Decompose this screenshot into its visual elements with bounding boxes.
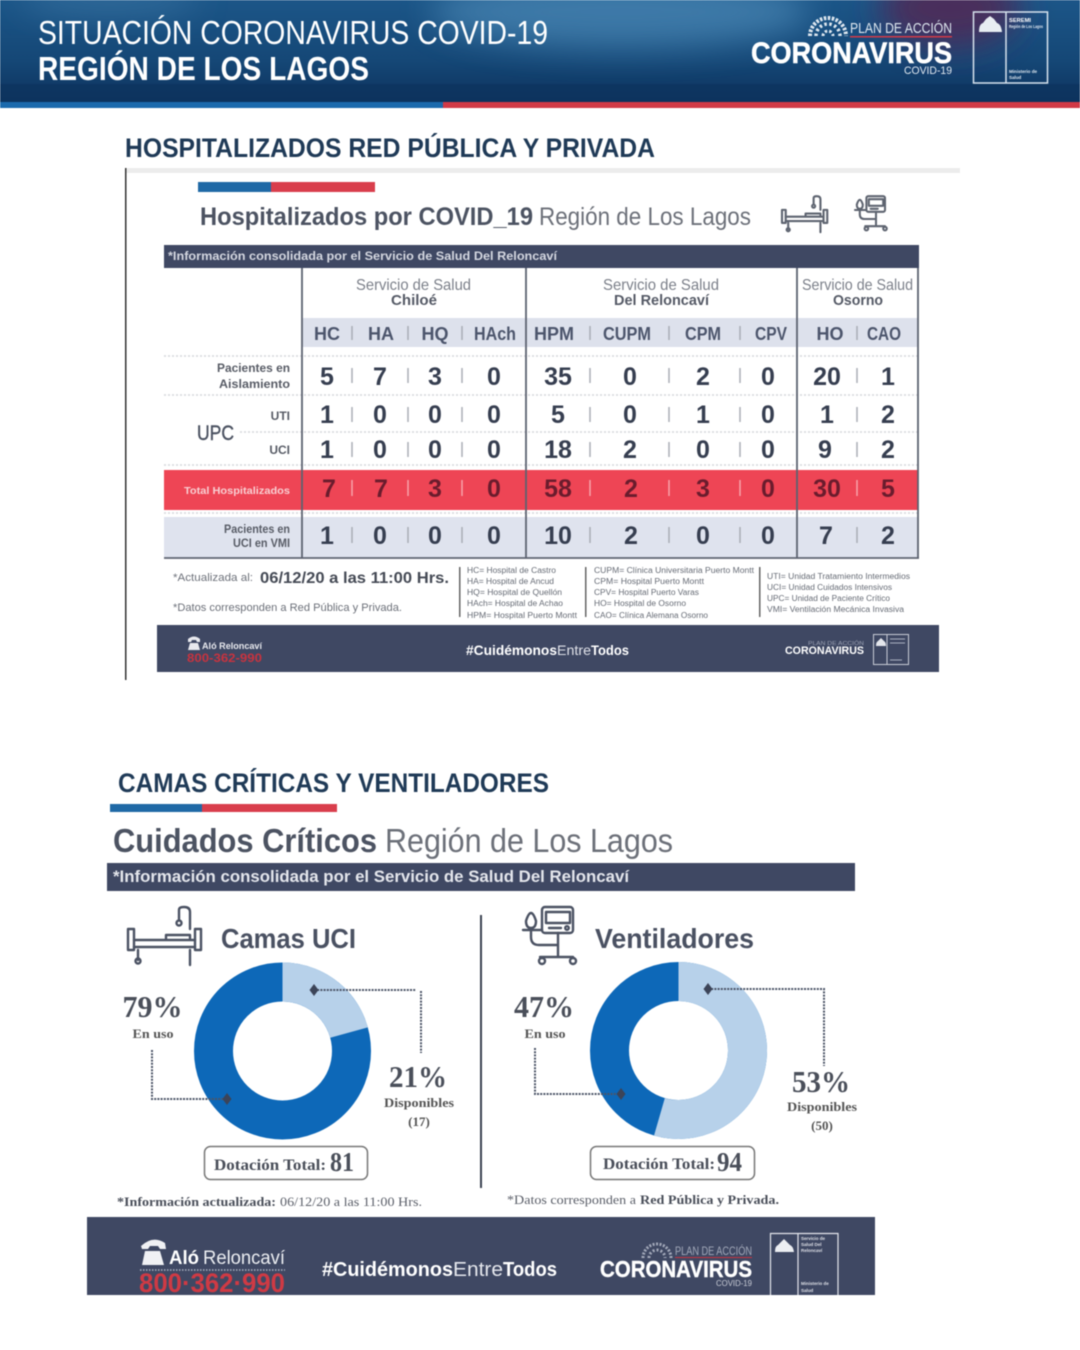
column headers: hospitals: CAO xyxy=(867,324,901,344)
row: pacientes en aislamiento: 5 xyxy=(320,363,334,391)
info bar: cuidados críticos: *Información consolidada por el Servicio de Salud Del Reloncaví xyxy=(113,867,630,886)
header title: REGIÓN DE LOS LAGOS xyxy=(38,50,369,87)
column headers: hospitals: CUPM xyxy=(603,324,651,344)
row: total hospitalizados: 7 xyxy=(374,475,388,503)
footer band: table: Aló Reloncaví xyxy=(202,641,263,651)
row: UTI: 0 xyxy=(487,401,501,429)
heading: ventiladores: Ventiladores xyxy=(595,923,754,954)
total box: 94 xyxy=(590,1146,754,1180)
total box: 81: 81 xyxy=(330,1147,354,1177)
callout: 21% disponibles: 21% xyxy=(389,1059,447,1094)
column headers: services: Osorno xyxy=(833,292,883,309)
column headers: services: Servicio de Salud xyxy=(802,277,913,294)
footer band: table: 800-362-990 xyxy=(187,651,262,665)
row: UTI xyxy=(320,401,895,429)
row: pacientes en aislamiento: 2 xyxy=(696,363,710,391)
column headers: services xyxy=(356,277,913,309)
callout: 53% disponibles: (50) xyxy=(811,1118,833,1133)
info bar xyxy=(164,245,919,268)
donut chart: camas UCI xyxy=(214,982,352,1120)
row: UCI: 2 xyxy=(881,436,895,464)
footer band: table: #Cuidémonos xyxy=(466,642,557,658)
helpline xyxy=(139,1248,286,1298)
note: datos corresponden: *Datos corresponden a xyxy=(507,1192,636,1207)
donut chart: ventiladores xyxy=(610,982,748,1120)
note: datos corresponden xyxy=(507,1192,779,1207)
row: UTI: 1 xyxy=(696,401,710,429)
panel title: cuidados críticos: Cuidados Críticos xyxy=(113,822,377,859)
row: UCI: 2 xyxy=(623,436,637,464)
hashtag: #Cuidémonos xyxy=(322,1259,453,1281)
row: total hospitalizados: 0 xyxy=(487,475,501,503)
column headers: services: Servicio de Salud xyxy=(603,277,719,294)
logo: plan de acción coronavirus: CORONAVIRUS xyxy=(751,37,952,70)
callout: 21% disponibles xyxy=(310,984,454,1129)
accent stripe xyxy=(198,182,375,192)
row: UTI: 0 xyxy=(428,401,442,429)
icon: hospital bed xyxy=(782,196,827,232)
row: pacientes en UCI en VMI xyxy=(320,522,895,550)
row: pacientes en aislamiento: 0 xyxy=(487,363,501,391)
total box: 94: Dotación Total: xyxy=(603,1156,715,1173)
panel title: Hospitalizados por COVID_19 xyxy=(200,203,533,231)
logo: servicio de salud: Ministerio de xyxy=(801,1281,829,1286)
row: total hospitalizados: 5 xyxy=(881,475,895,503)
total box: 81 xyxy=(204,1146,368,1180)
footer band: table: CORONAVIRUS xyxy=(785,645,864,657)
table: hospitalizados xyxy=(164,268,919,558)
column headers: hospitals: HQ xyxy=(422,324,448,344)
logo: plan de acción coronavirus: PLAN DE ACCIÓN xyxy=(850,20,952,37)
accent stripe: cuidados críticos xyxy=(110,804,337,812)
callout: 79% en uso: 79% xyxy=(122,989,182,1024)
callout: 53% disponibles: 53% xyxy=(792,1064,850,1099)
row: pacientes en UCI en VMI: 2 xyxy=(624,522,638,550)
callout: 47% en uso: 47% xyxy=(514,989,574,1024)
row labels: Total Hospitalizados xyxy=(184,485,290,497)
row: pacientes en aislamiento xyxy=(320,363,895,391)
logo: ministerio de salud: Ministerio de xyxy=(1009,69,1037,74)
logo: plan de acción coronavirus xyxy=(600,1244,752,1288)
update note: *Actualizada al: xyxy=(173,572,253,584)
panel: ventiladores xyxy=(507,907,857,1207)
row: pacientes en aislamiento: 1 xyxy=(881,363,895,391)
total box: 94: 94 xyxy=(717,1147,742,1177)
row: UTI: 1 xyxy=(320,401,334,429)
callout: 47% en uso: En uso xyxy=(524,1026,566,1041)
icon: ventilator xyxy=(855,196,887,230)
legend: hospital abbreviations: HAch= Hospital de Achao xyxy=(467,599,564,608)
callout: 53% disponibles: Disponibles xyxy=(787,1099,857,1114)
hashtag xyxy=(322,1259,557,1281)
legend: hospital abbreviations: CPV= Hospital Puerto Varas xyxy=(594,588,699,597)
footer band: table: Entre xyxy=(557,642,591,658)
panel title xyxy=(200,203,751,231)
row: UTI: 0 xyxy=(623,401,637,429)
legend: hospital abbreviations: HQ= Hospital de Quellón xyxy=(467,588,562,597)
row: total hospitalizados: 2 xyxy=(624,475,638,503)
logo: plan de acción coronavirus: COVID-19 xyxy=(904,65,952,77)
legend: hospital abbreviations: UPC= Unidad de Paciente Crítico xyxy=(767,594,891,603)
legend: hospital abbreviations: HC= Hospital de Castro xyxy=(467,566,557,575)
row labels: UTI xyxy=(271,409,290,423)
callout: 53% disponibles xyxy=(704,983,857,1133)
column headers: hospitals: HO xyxy=(816,324,844,344)
legend: hospital abbreviations: UCI= Unidad Cuidados Intensivos xyxy=(767,583,892,592)
row labels xyxy=(184,361,290,550)
callout: 47% en uso xyxy=(514,989,626,1100)
panel: camas UCI xyxy=(117,907,454,1209)
helpline: Reloncaví xyxy=(203,1248,286,1269)
row: pacientes en UCI en VMI: 0 xyxy=(428,522,442,550)
heading: camas críticas: CAMAS CRÍTICAS Y VENTILADORES xyxy=(118,767,549,798)
row: pacientes en aislamiento: 3 xyxy=(428,363,442,391)
callout: 21% disponibles: (17) xyxy=(408,1114,430,1129)
row: total hospitalizados: 3 xyxy=(428,475,442,503)
helpline: 800·362·990 xyxy=(139,1268,285,1298)
row: UCI xyxy=(320,436,895,464)
row: pacientes en UCI en VMI: 10 xyxy=(544,522,572,550)
helpline: Aló xyxy=(169,1248,199,1269)
column headers: services: Chiloé xyxy=(391,292,437,309)
row: pacientes en aislamiento: 0 xyxy=(623,363,637,391)
header banner xyxy=(0,0,1080,108)
logo: servicio de salud: Reloncaví xyxy=(801,1248,823,1253)
header title: SITUACIÓN CORONAVIRUS COVID-19 xyxy=(38,14,548,51)
legend: hospital abbreviations: HPM= Hospital Puerto Montt xyxy=(467,611,578,620)
hashtag: Todos xyxy=(503,1259,557,1281)
row: pacientes en UCI en VMI: 0 xyxy=(696,522,710,550)
total box: 81: Dotación Total: xyxy=(214,1157,326,1174)
heading: camas UCI: Camas UCI xyxy=(221,923,356,954)
panel title: Región de Los Lagos xyxy=(539,203,751,231)
row: total hospitalizados: 30 xyxy=(813,475,841,503)
row: total hospitalizados: 0 xyxy=(761,475,775,503)
row: UCI: 0 xyxy=(761,436,775,464)
callout: 21% disponibles: Disponibles xyxy=(384,1095,454,1110)
update note xyxy=(173,570,449,614)
legend: hospital abbreviations: CUPM= Clínica Universitaria Puerto Montt xyxy=(594,566,755,575)
legend: hospital abbreviations: UTI= Unidad Tratamiento Intermedios xyxy=(767,572,910,581)
note: información actualizada: *Información actualizada: xyxy=(117,1194,276,1209)
note: información actualizada xyxy=(117,1194,422,1209)
legend: hospital abbreviations: VMI= Ventilación Mecánica Invasiva xyxy=(767,605,905,614)
update note: *Datos corresponden a Red Pública y Privada. xyxy=(173,602,402,614)
note: información actualizada: 06/12/20 a las 11:00 Hrs. xyxy=(280,1194,422,1209)
row: total hospitalizados: 58 xyxy=(544,475,572,503)
legend: hospital abbreviations: HA= Hospital de Ancud xyxy=(467,577,554,586)
legend: hospital abbreviations: CPM= Hospital Puerto Montt xyxy=(594,577,705,586)
logo: servicio de salud xyxy=(770,1233,838,1295)
heading: hospitalizados: HOSPITALIZADOS RED PÚBLICA Y PRIVADA xyxy=(125,132,655,163)
info bar: *Información consolidada por el Servicio de Salud Del Reloncaví xyxy=(168,249,558,263)
column headers: hospitals xyxy=(314,324,901,344)
footer band: table: Todos xyxy=(591,642,629,658)
update note: 06/12/20 a las 11:00 Hrs. xyxy=(260,570,449,587)
row: UTI: 5 xyxy=(551,401,565,429)
panel title: cuidados críticos xyxy=(113,822,673,859)
row: UTI: 0 xyxy=(761,401,775,429)
row labels: Pacientes en xyxy=(217,361,290,375)
info bar: cuidados críticos xyxy=(107,863,855,891)
logo: ministerio de salud: Región de Los Lagos xyxy=(1009,24,1043,29)
logo: servicio de salud: Servicio de xyxy=(801,1236,826,1241)
row: pacientes en UCI en VMI: 0 xyxy=(761,522,775,550)
hashtag: Entre xyxy=(453,1259,503,1281)
icon: ventilator xyxy=(523,907,576,964)
logo: plan de acción coronavirus: CORONAVIRUS xyxy=(600,1256,752,1282)
row: UCI: 0 xyxy=(373,436,387,464)
row: pacientes en UCI en VMI: 2 xyxy=(881,522,895,550)
row: UTI: 1 xyxy=(820,401,834,429)
row: pacientes en aislamiento: 0 xyxy=(761,363,775,391)
row: UCI: 1 xyxy=(320,436,334,464)
logo: plan de acción coronavirus: COVID-19 xyxy=(716,1278,752,1288)
row: pacientes en aislamiento: 20 xyxy=(813,363,841,391)
icon: telephone xyxy=(141,1240,166,1265)
logo: servicio de salud: Salud Del xyxy=(801,1242,822,1247)
footer band: cuidados críticos xyxy=(87,1217,875,1298)
row: pacientes en aislamiento: 7 xyxy=(373,363,387,391)
row: UTI: 2 xyxy=(881,401,895,429)
column headers: services: Servicio de Salud xyxy=(356,277,471,294)
row: pacientes en UCI en VMI: 0 xyxy=(487,522,501,550)
callout: 79% en uso xyxy=(122,989,232,1105)
row: total hospitalizados: 7 xyxy=(322,475,336,503)
panel title: cuidados críticos: Región de Los Lagos xyxy=(385,822,673,859)
row: UTI: 0 xyxy=(373,401,387,429)
logo: servicio de salud: Salud xyxy=(801,1288,814,1293)
row: pacientes en UCI en VMI: 0 xyxy=(373,522,387,550)
row labels: UCI xyxy=(269,443,290,457)
column headers: hospitals: HA xyxy=(368,324,394,344)
header title xyxy=(38,14,548,87)
legend: hospital abbreviations: HO= Hospital de Osorno xyxy=(594,599,687,608)
legend: hospital abbreviations xyxy=(459,566,910,620)
row: UCI: 9 xyxy=(818,436,832,464)
row labels: UPC xyxy=(197,422,234,445)
row labels: Pacientes en xyxy=(224,522,290,536)
column headers: hospitals: HAch xyxy=(474,324,516,344)
legend: hospital abbreviations: CAO= Clínica Alemana Osorno xyxy=(594,611,709,620)
row: pacientes en aislamiento: 35 xyxy=(544,363,572,391)
note: datos corresponden: Red Pública y Privada. xyxy=(640,1192,779,1207)
column headers: hospitals: CPV xyxy=(755,324,787,344)
row: pacientes en UCI en VMI: 1 xyxy=(320,522,334,550)
row labels: UCI en VMI xyxy=(233,536,290,550)
column headers: hospitals: HPM xyxy=(534,324,574,344)
row: pacientes en UCI en VMI: 7 xyxy=(819,522,833,550)
logo: plan de acción coronavirus: PLAN DE ACCIÓN xyxy=(675,1245,752,1258)
logo: ministerio de salud: SEREMI xyxy=(1009,18,1031,24)
column headers: hospitals: HC xyxy=(314,324,340,344)
logo: ministerio de salud xyxy=(974,12,1048,83)
icon: hospital bed xyxy=(128,907,201,965)
row: UCI: 0 xyxy=(487,436,501,464)
row labels: Aislamiento xyxy=(219,377,290,391)
row: total hospitalizados: 3 xyxy=(696,475,710,503)
row: UCI: 18 xyxy=(544,436,572,464)
footer band: table xyxy=(157,625,939,672)
callout: 79% en uso: En uso xyxy=(132,1026,174,1041)
logo: plan de acción coronavirus xyxy=(751,18,952,77)
logo: ministerio de salud: Salud xyxy=(1009,75,1022,80)
footer band: table: PLAN DE ACCIÓN xyxy=(808,640,865,647)
row: total hospitalizados xyxy=(322,475,895,503)
row: UCI: 0 xyxy=(696,436,710,464)
panel: hospitalizados por covid xyxy=(125,168,960,680)
row: UCI: 0 xyxy=(428,436,442,464)
column headers: services: Del Reloncaví xyxy=(614,292,710,309)
column headers: hospitals: CPM xyxy=(685,324,721,344)
